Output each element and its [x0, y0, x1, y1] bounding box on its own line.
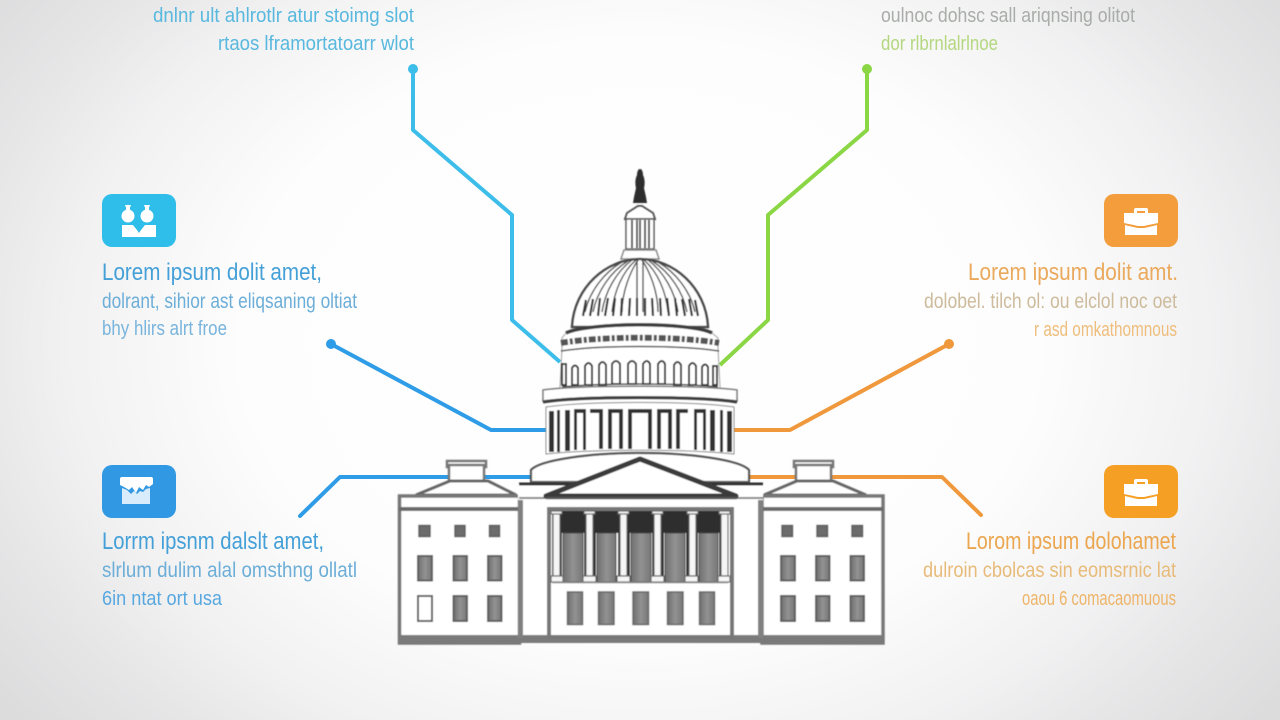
callout: top left text	[153, 5, 414, 55]
colonnade	[543, 386, 737, 454]
callout: top left text: dnlnr ult ahlrotlr atur stoimg slot	[153, 5, 414, 27]
connector: top right green	[720, 64, 872, 365]
connector: lower right orange	[748, 477, 981, 515]
capitol building illustration	[399, 169, 883, 643]
connector: lower left blue	[300, 477, 532, 516]
callout: top right text	[881, 5, 1135, 55]
callout: lower right text: dulroin cbolcas sin eomsrnic lat	[923, 559, 1176, 582]
callout: middle right text	[924, 259, 1178, 341]
icon: cyan monuments	[102, 194, 176, 247]
icon: orange briefcase upper	[1104, 194, 1178, 247]
callout: middle right text: dolobel. tilch ol: ou elclol noc oet	[924, 290, 1177, 313]
callout: lower right text: oaou 6 comacaomuous	[1022, 588, 1176, 610]
callout: lower right text	[923, 528, 1176, 610]
drum with frieze and arched windows	[560, 325, 720, 388]
callout: middle right text: r asd omkathomnous	[1034, 319, 1177, 341]
callout: lower left text: slrlum dulim alal omsthng ollatl	[102, 559, 357, 582]
callout: lower left text: Lorrm ipsnm dalslt amet,	[102, 528, 324, 555]
left wing	[399, 461, 520, 643]
icon: orange briefcase lower	[1104, 465, 1178, 518]
callout: middle left text: bhy hlirs alrt froe	[102, 318, 227, 340]
icon: blue map building	[102, 465, 176, 518]
drum base curve	[531, 453, 749, 482]
dome lantern and statue	[621, 169, 659, 259]
callout: middle left text: dolrant, sihior ast eliqsaning oltiat	[102, 290, 357, 313]
right wing	[762, 461, 883, 643]
callout: lower left text	[102, 528, 357, 610]
callout: middle left text	[102, 259, 357, 340]
callout: middle right text: Lorem ipsum dolit amt.	[968, 259, 1178, 286]
central block with pediment	[518, 459, 763, 643]
callout: lower left text: 6in ntat ort usa	[102, 588, 223, 610]
central portico with columns	[549, 509, 732, 637]
callout: top left text: rtaos lframortatoarr wlot	[218, 33, 414, 55]
callout: lower right text: Lorom ipsum dolohamet	[966, 528, 1176, 555]
callout: top right text: oulnoc dohsc sall ariqnsing olitot	[881, 5, 1135, 27]
callout: top right text: dor rlbrnlalrlnoe	[881, 33, 998, 55]
connector: middle right orange	[733, 339, 954, 430]
connector: top left cyan	[408, 64, 560, 362]
main dome with ribs	[572, 259, 708, 327]
callout: middle left text: Lorem ipsum dolit amet,	[102, 259, 322, 286]
connector: middle left blue	[326, 339, 548, 430]
